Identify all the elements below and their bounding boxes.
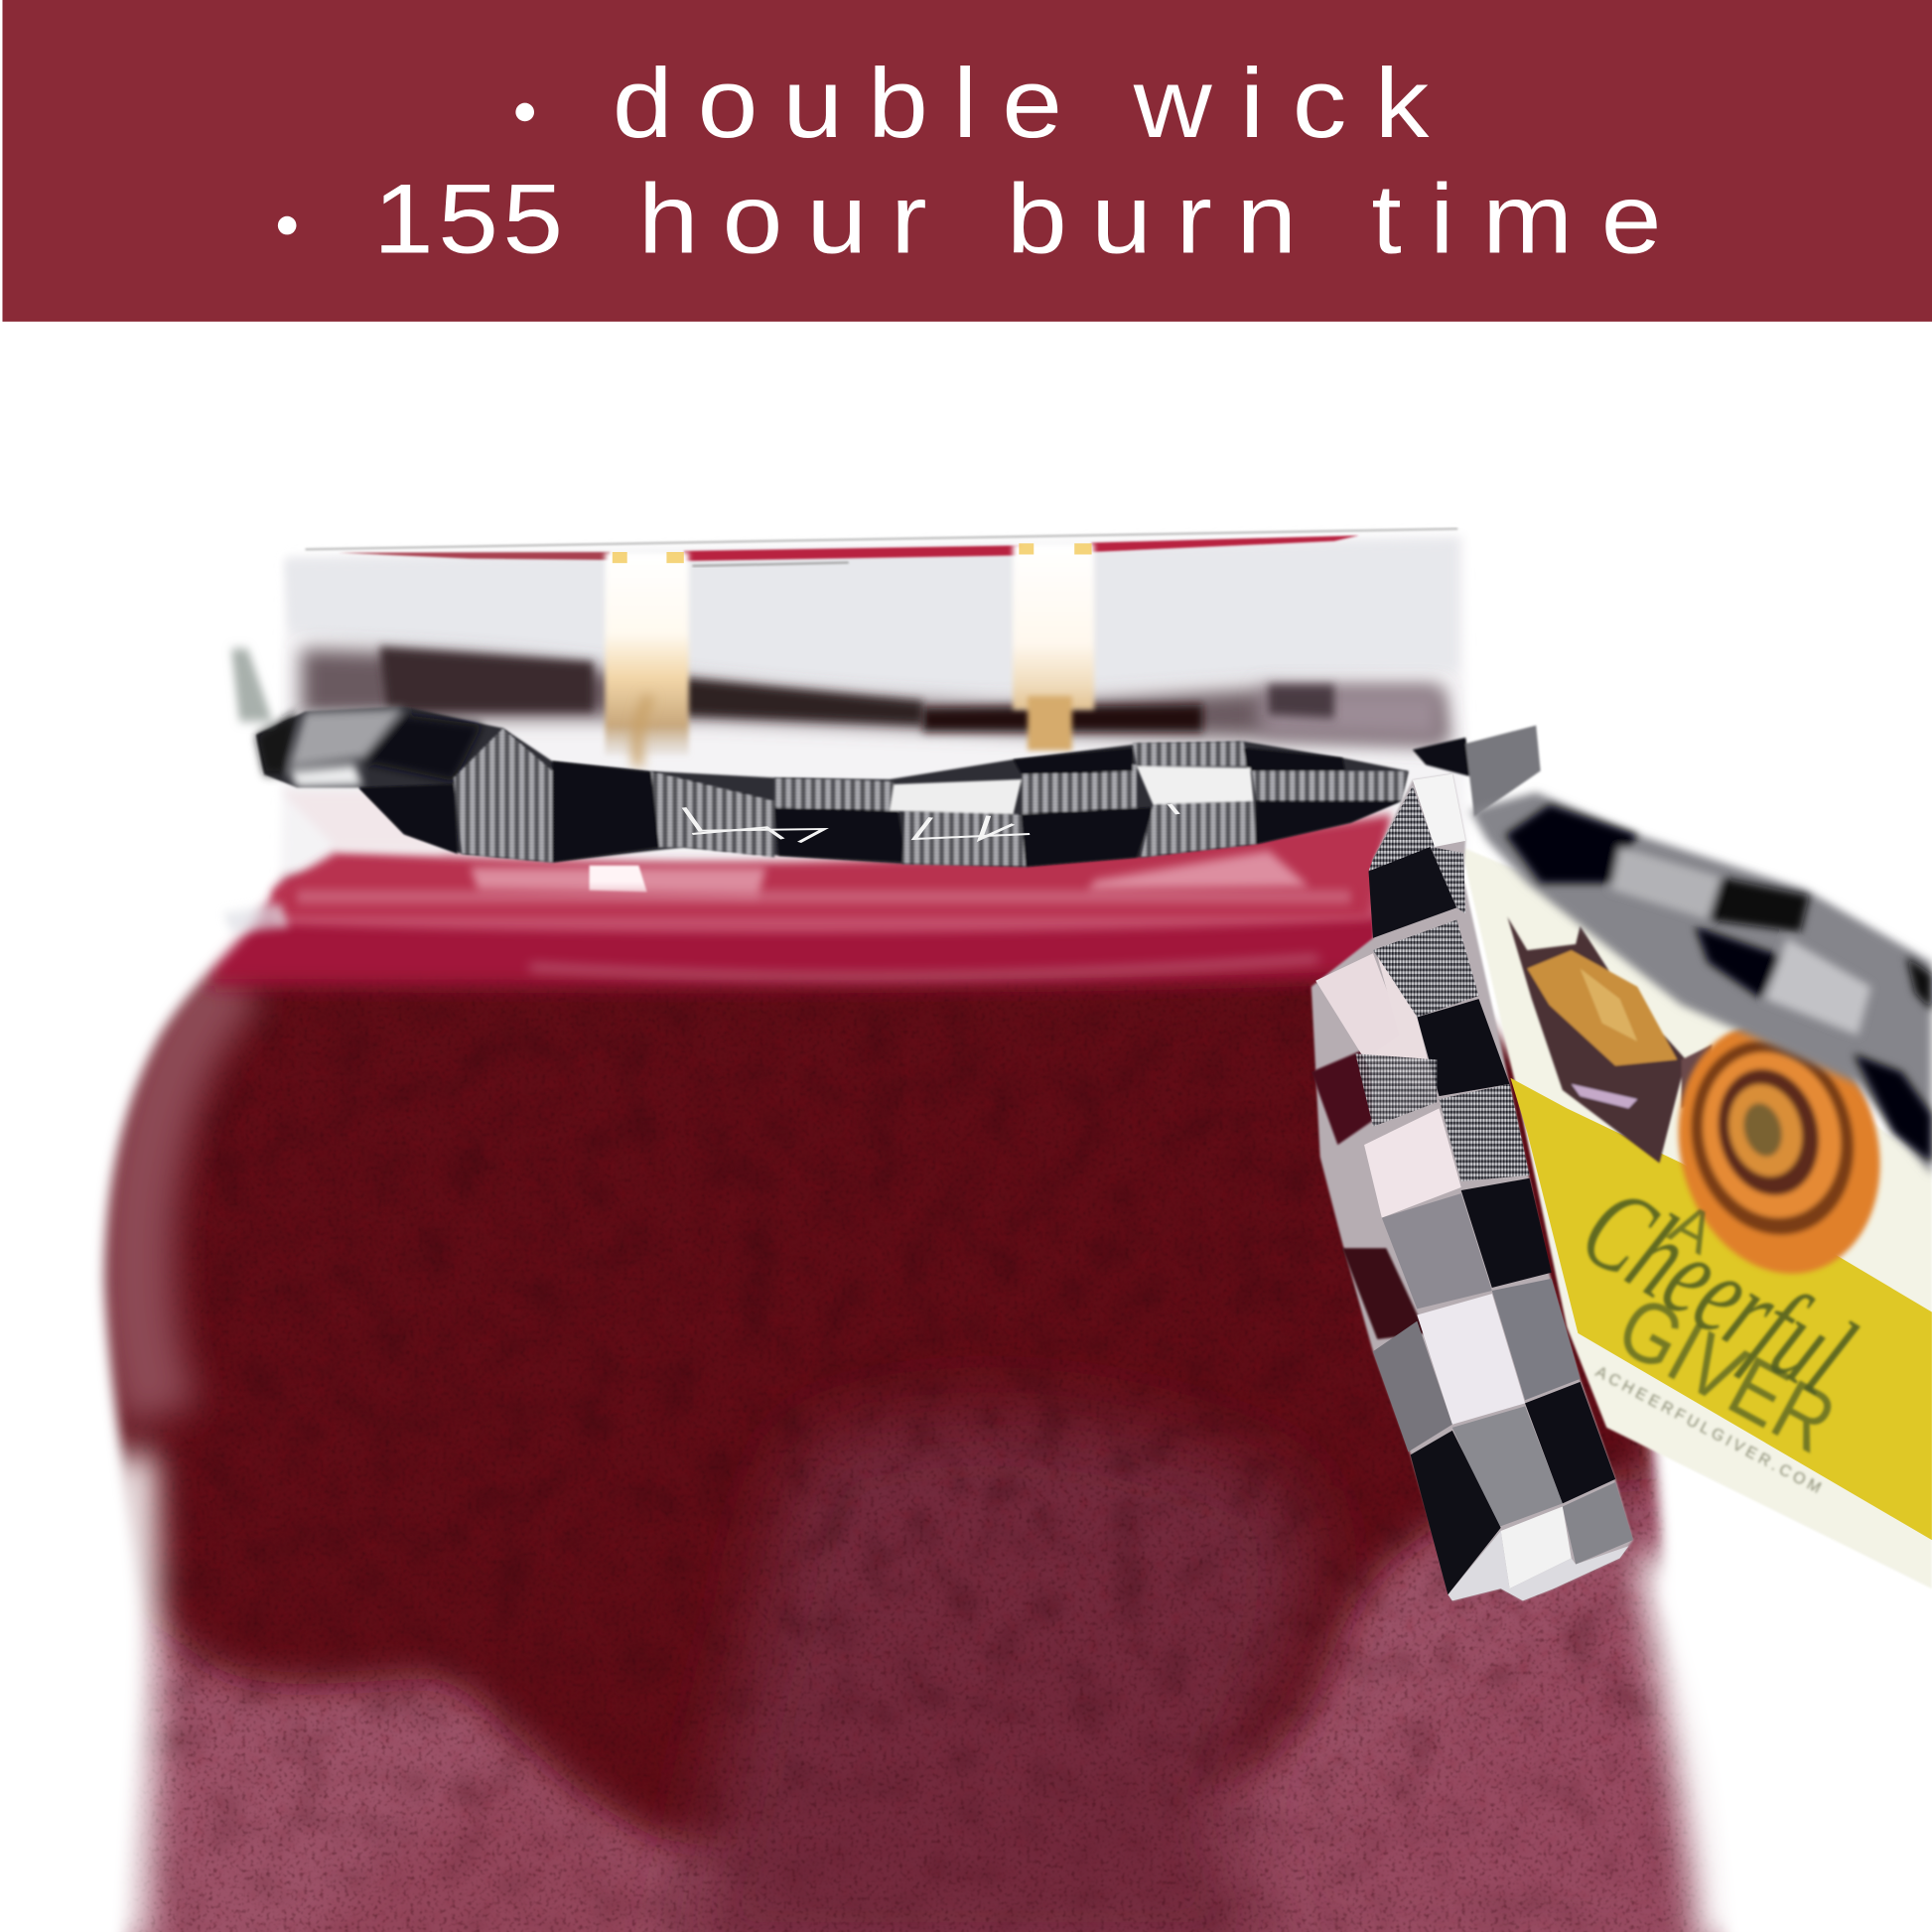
wax shoulder with glass highlights (223, 791, 1392, 933)
yellow band (1510, 1078, 1932, 1540)
tag brand text: GIVER (1602, 1278, 1850, 1471)
tag brand text: A (1660, 1189, 1726, 1267)
candle photo (73, 529, 1932, 1932)
gingham ribbon around neck (231, 648, 1408, 867)
banner background (2, 0, 1932, 322)
gingham ribbon hanging end (1311, 774, 1633, 1600)
wax line at rim (306, 529, 1457, 566)
wax body (73, 850, 1774, 1932)
neck crimson (205, 874, 1374, 999)
feature line 1: double wick: wick (1133, 49, 1430, 159)
ribbon base (256, 707, 1408, 867)
frayed threads (684, 804, 1177, 842)
hang tag (1461, 847, 1932, 1588)
shoulder mauve band (135, 973, 234, 1417)
feature line 1: double wick: double (613, 49, 1062, 159)
glass jar top (281, 529, 1466, 894)
feature line 2: 155 hour burn time: hour (638, 165, 927, 274)
feature line 2: 155 hour burn time: 155 (373, 165, 563, 274)
feature line 1: double wick (515, 49, 1430, 159)
flame: left (605, 552, 689, 766)
soft fade at jar edges (123, 1453, 136, 1932)
feature line 2: 155 hour burn time (278, 165, 1661, 274)
flame: right (1013, 543, 1094, 751)
feature line 2: 155 hour burn time: time (1371, 165, 1661, 274)
blurred ribbon tail (1413, 726, 1932, 1175)
feature line 2: 155 hour burn time: burn (1007, 165, 1297, 274)
top banner (2, 0, 1932, 322)
tag brand text: ACHEERFULGIVER.COM (1592, 1363, 1824, 1497)
ribbon base (1311, 774, 1633, 1600)
muffin illustration (1507, 916, 1713, 1163)
tag card (1461, 847, 1932, 1588)
cinnamon roll illustration (1651, 1001, 1907, 1297)
